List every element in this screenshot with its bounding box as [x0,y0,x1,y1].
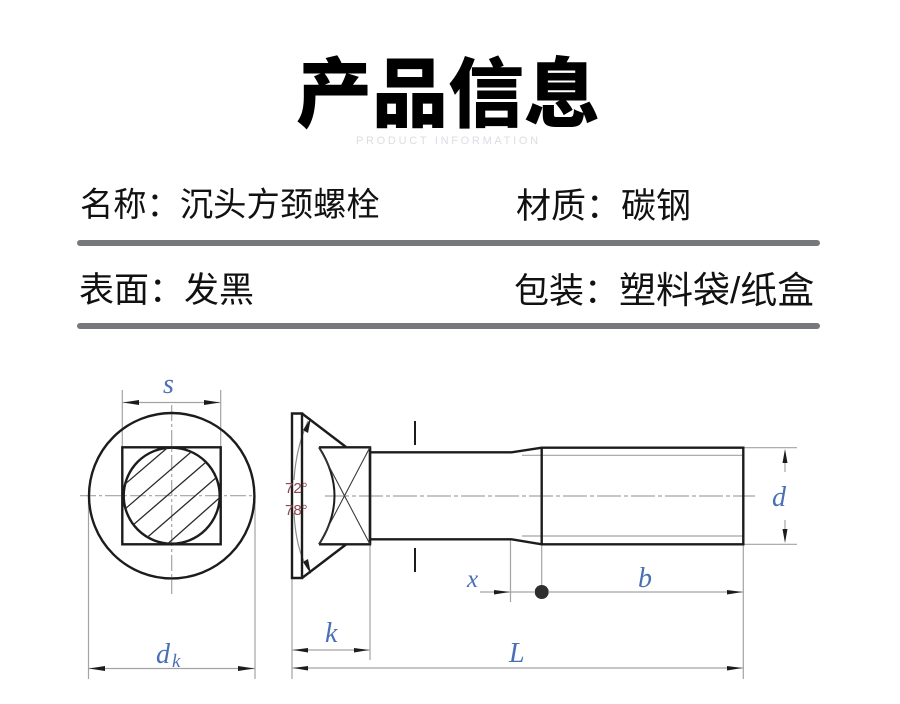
dimension label d: d [772,482,787,513]
spec: packaging: 包装：塑料袋/纸盒 [514,270,814,311]
dimension label L: L [508,638,525,669]
dimension label dk: d [156,639,171,670]
divider two [77,323,820,329]
dimension label dk: k [172,651,181,672]
dimension label b: b [638,563,652,594]
angle label 78: 78° [285,502,308,519]
divider one [77,240,820,246]
drawing: side view [292,414,797,679]
spec: surface: 表面：发黑 [79,271,254,310]
dimension label k: k [325,618,338,649]
subtitle: PRODUCT INFORMATION [356,135,541,147]
spec: name: 名称：沉头方颈螺栓 [80,187,380,224]
dimension label s: s [163,369,174,400]
spec: material: 材质：碳钢 [516,187,691,226]
title: 产品信息 [296,53,600,138]
angle label 72: 72° [285,480,308,497]
technical drawing [80,380,797,679]
dimension label dk [156,639,181,672]
drawing: front view [80,390,255,679]
icon: section dot [535,585,549,599]
dimension label x: x [466,566,478,593]
